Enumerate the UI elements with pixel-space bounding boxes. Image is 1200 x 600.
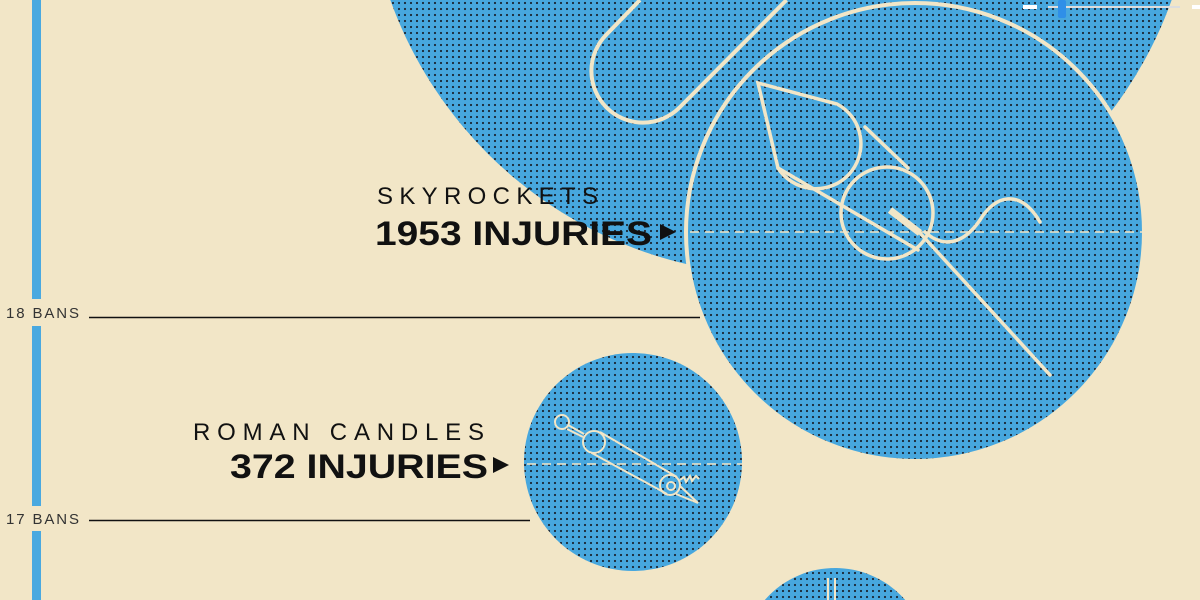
label: roman candles [194, 423, 509, 478]
left axis bar [32, 0, 41, 600]
axis label 17 bans: 17 BANS [6, 511, 79, 528]
bubble: skyrockets [686, 3, 1145, 461]
axis label 18 bans: 18 BANS [6, 305, 79, 322]
icon: roman candle [555, 415, 699, 503]
icon: capsule outline [591, 0, 786, 123]
label: skyrockets: 1953 INJURIES [375, 215, 652, 253]
label: skyrockets: SKYROCKETS [377, 183, 598, 210]
slider control [1023, 0, 1200, 18]
background circle: large firework [366, 0, 1196, 275]
bubble: bottom partial [764, 568, 906, 600]
icon: skyrocket [758, 83, 1050, 375]
label: roman candles: ROMAN CANDLES [193, 419, 484, 446]
bubble: roman candles [524, 353, 742, 571]
label: skyrockets [377, 187, 676, 246]
label: roman candles: 372 INJURIES [230, 448, 488, 486]
